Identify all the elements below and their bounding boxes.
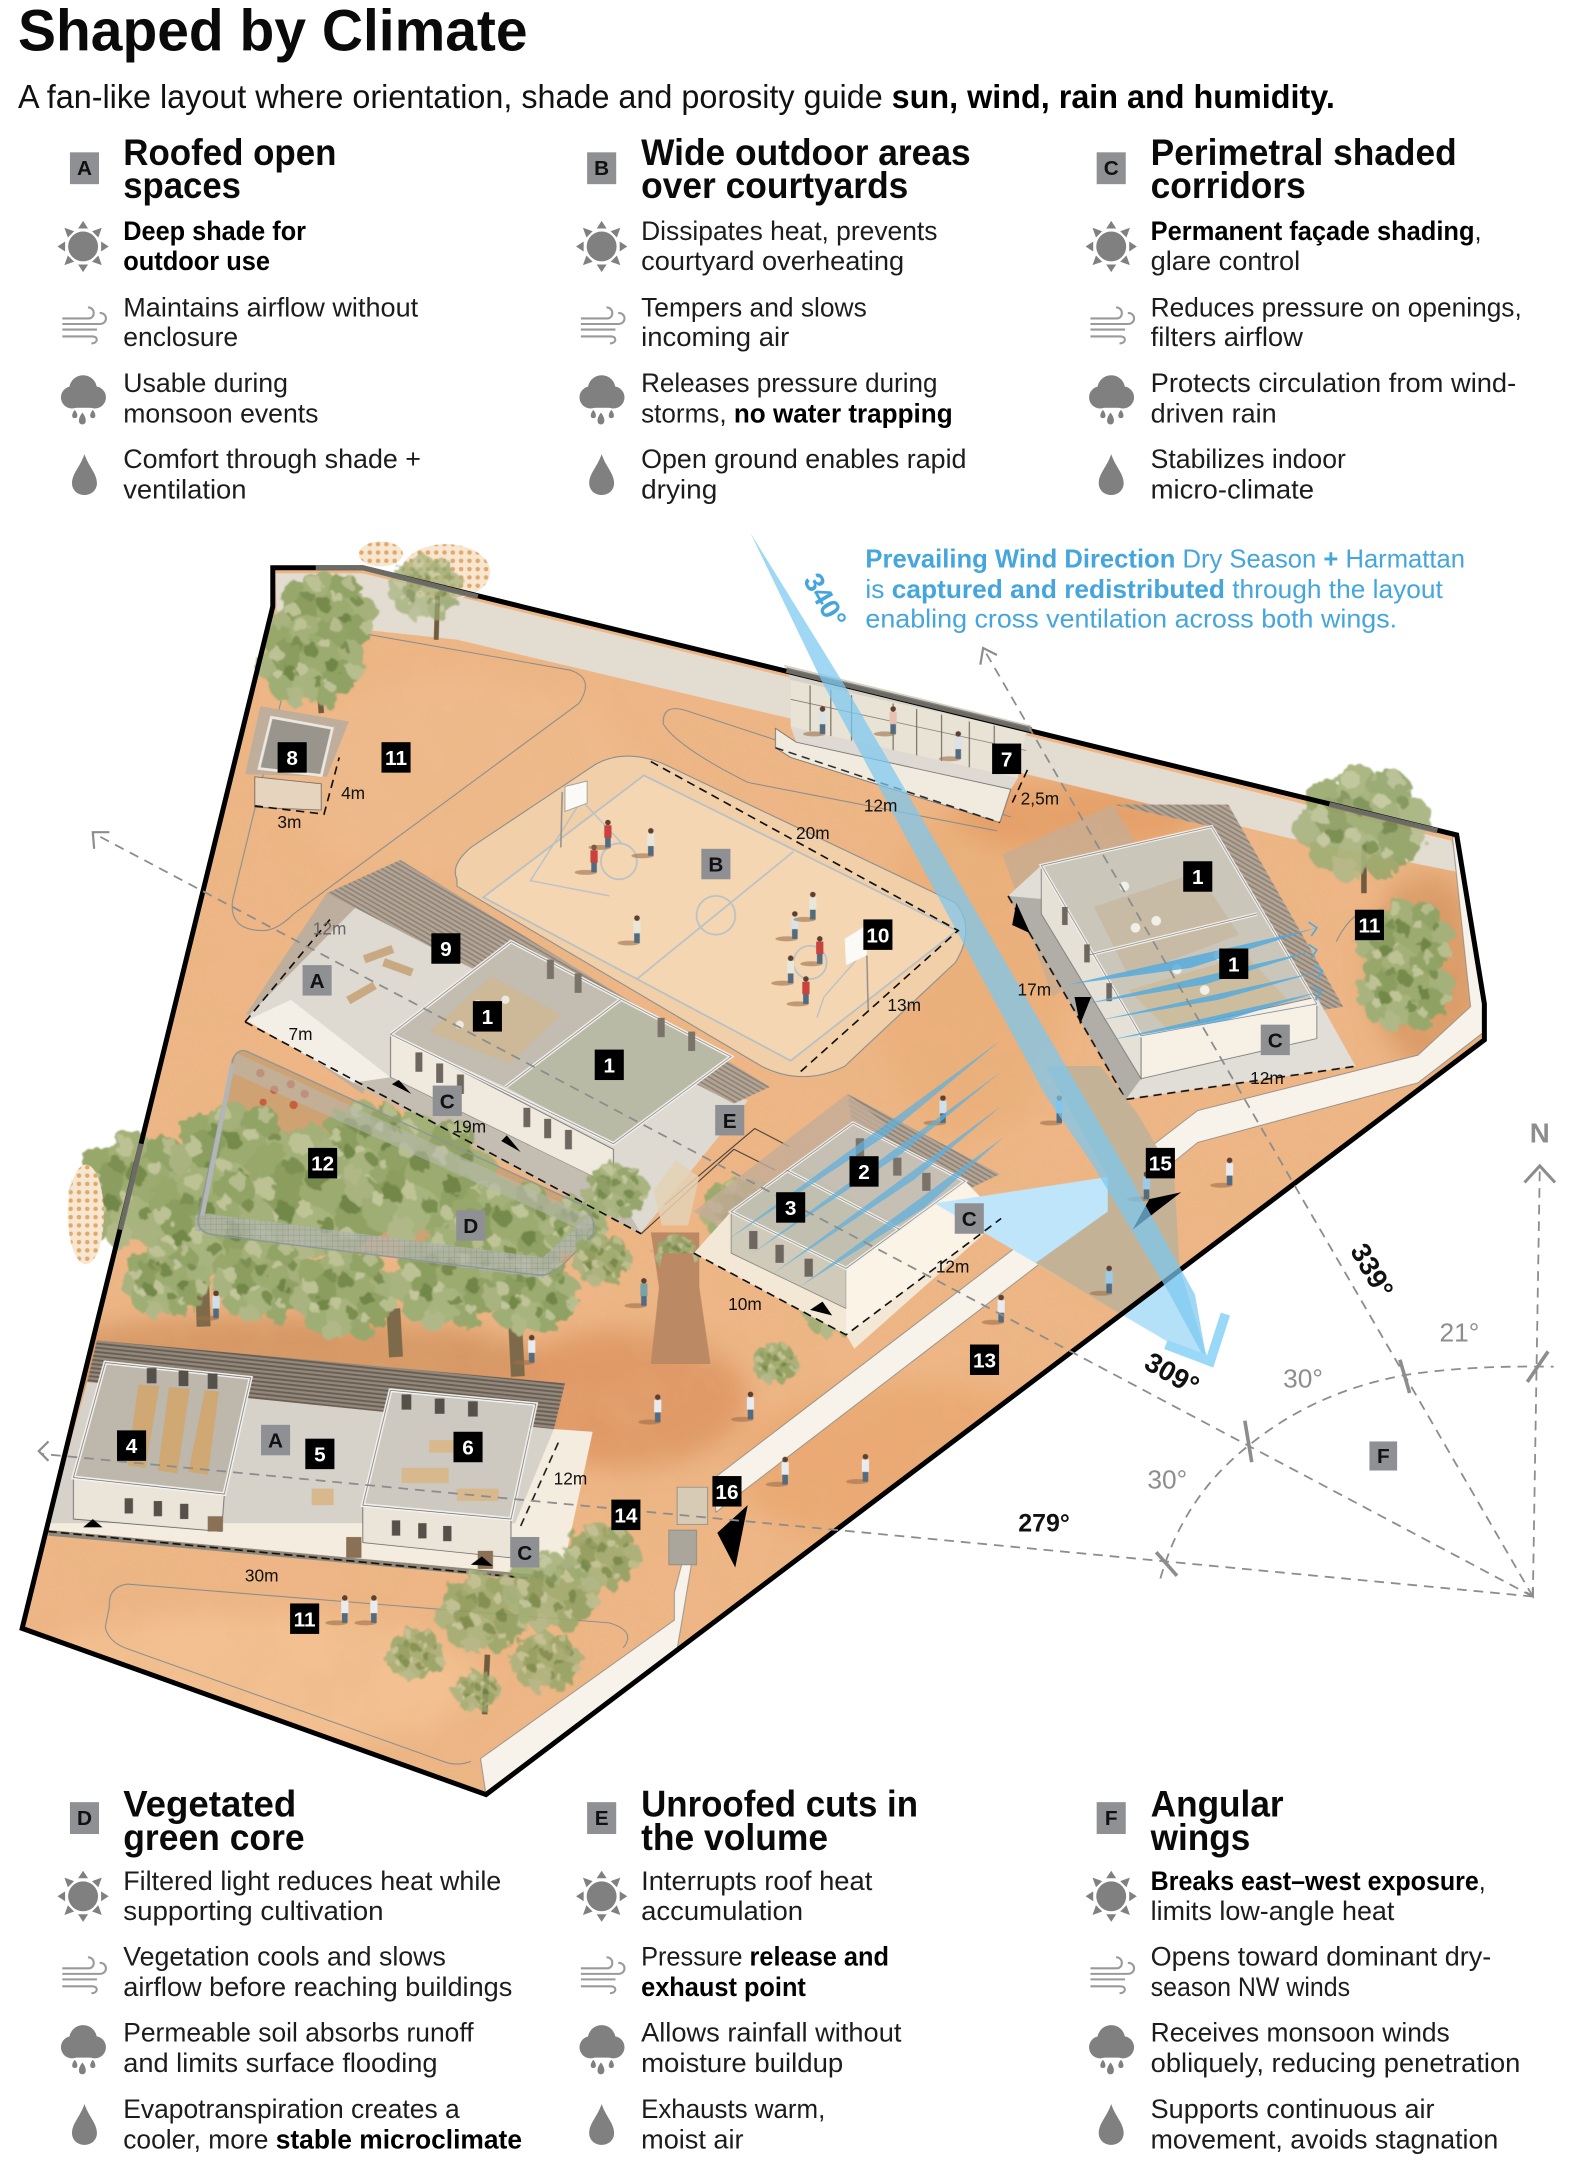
dimension labels: 12m	[936, 1257, 969, 1277]
letter tags: C	[1268, 1030, 1283, 1053]
letter tags: A	[268, 1430, 283, 1453]
building: south wing rooms 4 5 6	[48, 1340, 593, 1585]
building: central wing	[694, 1094, 1001, 1349]
panel: D vegetated green core	[57, 1783, 522, 2154]
heading C: corridors	[1151, 164, 1306, 206]
icon: humidity	[1099, 2104, 1124, 2145]
humidity text	[641, 2094, 825, 2154]
orientation diagram	[39, 648, 1555, 1597]
sun text	[1151, 216, 1482, 276]
number tags: 3	[785, 1197, 796, 1220]
heading A	[123, 131, 336, 206]
room 1 students	[456, 996, 510, 1029]
letter tags: B	[708, 854, 723, 877]
people	[197, 1095, 1233, 1625]
heading F: Angular	[1151, 1783, 1284, 1825]
icon: humidity	[1099, 454, 1124, 495]
rain text: obliquely, reducing penetration	[1151, 2048, 1520, 2078]
wind description	[865, 546, 1465, 633]
dimension labels: 12m	[864, 795, 897, 815]
sun text: limits low-angle heat	[1151, 1896, 1395, 1926]
rain text	[1151, 368, 1516, 428]
perimeter walls	[480, 835, 1484, 1795]
icon: humidity	[72, 2104, 97, 2145]
fence band	[195, 1213, 595, 1278]
number tags: 11	[385, 747, 407, 770]
rain text: Allows rainfall without	[641, 2018, 902, 2048]
wind text: incoming air	[641, 322, 789, 352]
humidity text: Stabilizes indoor	[1151, 444, 1346, 474]
trees: corners	[68, 541, 1454, 1714]
angle labels: 21°	[1440, 1318, 1479, 1348]
heading E: Unroofed cuts in	[641, 1783, 918, 1825]
angle labels	[1018, 1238, 1479, 1537]
rain text	[641, 368, 953, 428]
number tags: 1	[1192, 866, 1204, 889]
dimension labels: 7m	[288, 1024, 312, 1044]
sun text	[641, 216, 937, 276]
trunks	[202, 1281, 518, 1376]
icon: rain	[579, 375, 624, 424]
number tags: 10	[866, 924, 889, 947]
sun text: Deep shade for	[123, 216, 306, 246]
icon: sun	[57, 1871, 109, 1922]
humidity text	[641, 444, 967, 504]
badge B	[587, 152, 616, 184]
number tags: 4	[126, 1435, 138, 1458]
icon: wind	[62, 1957, 106, 1993]
icon: sun	[1086, 1871, 1137, 1922]
sun text: Filtered light reduces heat while	[123, 1866, 501, 1896]
building: north-west classroom wing	[246, 860, 789, 1234]
number tags: 5	[314, 1444, 326, 1467]
humidity text: Exhausts warm,	[641, 2094, 825, 2124]
dimension labels: 13m	[887, 995, 921, 1015]
badge F	[1097, 1802, 1126, 1834]
dimension labels: 19m	[453, 1117, 486, 1137]
icon: humidity	[72, 454, 97, 495]
wind text: filters airflow	[1151, 322, 1303, 352]
humidity text: micro-climate	[1151, 474, 1314, 504]
sun text: supporting cultivation	[123, 1896, 384, 1926]
heading B	[641, 131, 971, 206]
icon: rain	[1089, 2025, 1134, 2074]
wind angle label: 340°	[797, 568, 853, 633]
letter tags: C	[440, 1090, 455, 1113]
angle ticks	[1156, 1351, 1548, 1576]
letter tags: E	[723, 1110, 737, 1133]
dimension labels: 12m	[1250, 1068, 1284, 1088]
panel: F angular wings	[1086, 1783, 1520, 2154]
wind text	[123, 292, 419, 352]
sun text: accumulation	[641, 1896, 803, 1926]
heading C: Perimetral shaded	[1151, 131, 1457, 173]
dimension labels	[245, 783, 1284, 1585]
number tags: 11	[294, 1608, 316, 1631]
number tags: 16	[715, 1481, 739, 1504]
wind: central wing fins	[728, 1041, 1004, 1286]
badge E	[587, 1802, 616, 1834]
rain text: storms, no water trapping	[641, 398, 953, 428]
badge C: C	[1104, 157, 1119, 180]
rain text	[123, 2018, 474, 2078]
badge D: D	[77, 1807, 92, 1830]
dimension labels: 12m	[554, 1468, 587, 1488]
heading D: Vegetated	[123, 1783, 296, 1825]
rain text	[641, 2018, 902, 2078]
panel: E unroofed cuts	[576, 1783, 918, 2154]
north label: N	[1530, 1117, 1550, 1148]
sun text: Dissipates heat, prevents	[641, 216, 937, 246]
humidity text	[1151, 2094, 1498, 2154]
icon: rain	[61, 375, 106, 424]
heading D	[123, 1783, 305, 1858]
sun text	[641, 1866, 873, 1926]
ground tonal patches	[76, 778, 1470, 1738]
site boundary	[22, 568, 1484, 1795]
number tags: 8	[286, 747, 298, 770]
rain text: monsoon events	[123, 398, 318, 428]
badge F: F	[1105, 1807, 1118, 1830]
number tags	[117, 742, 1384, 1634]
players	[575, 820, 823, 1006]
wind text: enclosure	[123, 322, 238, 352]
humidity text: Comfort through shade +	[123, 444, 421, 474]
heading B: over courtyards	[641, 164, 908, 206]
panel: C perimetral shaded corridors	[1086, 131, 1522, 504]
letter tags: C	[517, 1542, 532, 1565]
heading F	[1150, 1783, 1284, 1858]
ground mottling	[22, 568, 1484, 1795]
panel: B wide outdoor areas	[576, 131, 971, 504]
icon: rain	[61, 2025, 106, 2074]
wind text	[1151, 1942, 1491, 2002]
wind: prevailing direction fan	[935, 1066, 1210, 1367]
heading F: wings	[1150, 1816, 1250, 1858]
humidity text: Evapotranspiration creates a	[123, 2094, 461, 2124]
letter tags: F	[1377, 1445, 1390, 1468]
letter tags: D	[463, 1215, 478, 1238]
number tags: 6	[462, 1437, 474, 1460]
number tags: 1	[603, 1054, 615, 1077]
dimension labels: 10m	[728, 1294, 762, 1314]
icon: humidity	[589, 2104, 614, 2145]
entrance arrows	[392, 903, 1181, 1567]
wind direction callout	[797, 546, 1465, 633]
number tags: 2	[858, 1161, 870, 1184]
rain text: moisture buildup	[641, 2048, 843, 2078]
panel: A roofed open spaces	[57, 131, 421, 504]
sun text: Breaks east–west exposure,	[1151, 1866, 1486, 1896]
wind text: Pressure release and	[641, 1942, 889, 1972]
court B	[455, 756, 966, 1077]
angle labels: 279°	[1018, 1509, 1070, 1537]
sun text: outdoor use	[123, 246, 270, 276]
wind text: season NW winds	[1151, 1972, 1350, 2002]
rain text: driven rain	[1151, 398, 1277, 428]
icon: wind	[581, 1957, 624, 1993]
rain text: Protects circulation from wind-	[1151, 368, 1516, 398]
wind text	[123, 1942, 512, 2002]
badge E: E	[595, 1807, 609, 1830]
sun text	[123, 216, 306, 276]
pedestrian path outlines	[105, 630, 1454, 1764]
number tags: 1	[1228, 953, 1240, 976]
wind text	[641, 292, 867, 352]
icon: rain	[1089, 375, 1134, 424]
angle labels: 30°	[1147, 1465, 1187, 1495]
building: pavilion 8	[245, 706, 349, 810]
wind text: Maintains airflow without	[123, 292, 419, 322]
wind text: Opens toward dominant dry-	[1151, 1942, 1491, 1972]
number tags: 14	[614, 1504, 638, 1527]
number tags: 9	[440, 938, 452, 961]
dimension labels: 20m	[796, 823, 830, 843]
ground	[22, 568, 1484, 1795]
dimension labels: 3m	[277, 812, 301, 832]
wind: east wing fins	[1069, 922, 1322, 1040]
dotted tree ghosts	[68, 541, 490, 1264]
wind: prevailing direction band	[750, 533, 1225, 1364]
chickens	[256, 1069, 309, 1109]
number tags: 7	[1001, 748, 1012, 771]
letter tags: A	[310, 970, 325, 993]
rain text: Permeable soil absorbs runoff	[123, 2018, 474, 2048]
humidity text	[1151, 444, 1346, 504]
wind text	[1151, 292, 1522, 352]
sun text	[123, 1866, 501, 1926]
wind text: airflow before reaching buildings	[123, 1972, 512, 2002]
icon: rain	[579, 2025, 624, 2074]
humidity text	[123, 2094, 522, 2154]
rain text: Releases pressure during	[641, 368, 937, 398]
angle labels: 309°	[1139, 1346, 1205, 1401]
number tags: 13	[973, 1349, 996, 1372]
rain text: Receives monsoon winds	[1151, 2018, 1450, 2048]
wind text: exhaust point	[641, 1972, 806, 2002]
building: east classroom wing	[1003, 804, 1356, 1099]
hoops	[565, 781, 587, 811]
wind text	[641, 1942, 889, 2002]
dashed orientation rays	[42, 648, 1554, 1597]
wind description: is captured and redistributed through the layout	[865, 576, 1443, 604]
top boundary wall	[276, 573, 1459, 872]
number tags: 11	[1358, 915, 1380, 938]
icon: sun	[57, 221, 109, 272]
humidity text: drying	[641, 474, 717, 504]
sun text: courtyard overheating	[641, 246, 904, 276]
number tags: 1	[482, 1006, 493, 1029]
humidity text: cooler, more stable microclimate	[123, 2124, 522, 2154]
wind text: Vegetation cools and slows	[123, 1942, 446, 1972]
wind description: Prevailing Wind Direction Dry Season + Harmattan	[865, 546, 1465, 574]
heading B: Wide outdoor areas	[641, 131, 971, 173]
humidity text: Supports continuous air	[1151, 2094, 1435, 2124]
icon: sun	[576, 221, 627, 272]
dimension lines	[245, 757, 1027, 1335]
number tags: 12	[311, 1153, 334, 1176]
baobab tree	[571, 1160, 873, 1384]
wind text: Tempers and slows	[641, 292, 867, 322]
wind text: Reduces pressure on openings,	[1151, 292, 1522, 322]
rain text	[123, 368, 318, 428]
heading D: green core	[123, 1816, 305, 1858]
badge B: B	[594, 157, 609, 180]
badge C	[1097, 152, 1126, 184]
vegetated core	[68, 1051, 608, 1376]
building: latrine block 7	[775, 665, 1032, 822]
heading A: spaces	[123, 164, 241, 206]
sun text: Permanent façade shading,	[1151, 216, 1482, 246]
shrubs and canopy	[68, 1100, 608, 1341]
sun text: glare control	[1151, 246, 1300, 276]
icon: wind	[1090, 307, 1134, 343]
sun text: Interrupts roof heat	[641, 1866, 873, 1896]
angle labels: 339°	[1344, 1238, 1400, 1303]
ray arrowheads	[39, 648, 1555, 1597]
angle labels: 30°	[1283, 1363, 1323, 1393]
humidity text: movement, avoids stagnation	[1151, 2124, 1498, 2154]
sun text	[1151, 1866, 1486, 1926]
badge A	[70, 152, 99, 184]
dimension labels: 4m	[341, 783, 365, 803]
icon: wind	[1090, 1957, 1134, 1993]
humidity text	[123, 444, 421, 504]
letter tags	[261, 849, 1397, 1567]
humidity text: moist air	[641, 2124, 744, 2154]
rain text: Usable during	[123, 368, 288, 398]
rain text	[1151, 2018, 1520, 2078]
badge A: A	[77, 157, 92, 180]
icon: sun	[1086, 221, 1137, 272]
dimension labels: 12m	[313, 919, 346, 939]
site plan illustration	[14, 533, 1484, 1795]
rain text: and limits surface flooding	[123, 2048, 438, 2078]
dimension labels: 2,5m	[1021, 788, 1059, 808]
humidity text: Open ground enables rapid	[641, 444, 967, 474]
icon: sun	[576, 1871, 627, 1922]
wind description: enabling cross ventilation across both wings.	[865, 605, 1397, 633]
dimension labels: 30m	[245, 1565, 279, 1585]
heading E: the volume	[641, 1816, 828, 1858]
icon: wind	[581, 307, 624, 343]
icon: wind	[62, 307, 106, 343]
number tags: 15	[1149, 1153, 1172, 1176]
title: Shaped by Climate	[18, 0, 528, 64]
subtitle: A fan-like layout where orientation, shade and porosity guide sun, wind, rain and humidity.	[18, 79, 1335, 116]
badge D	[70, 1802, 99, 1834]
icon: humidity	[589, 454, 614, 495]
humidity text: ventilation	[123, 474, 246, 504]
heading E	[641, 1783, 918, 1858]
dimension labels: 17m	[1018, 980, 1051, 1000]
letter tags: C	[962, 1208, 977, 1231]
heading C	[1151, 131, 1457, 206]
heading A: Roofed open	[123, 131, 336, 173]
